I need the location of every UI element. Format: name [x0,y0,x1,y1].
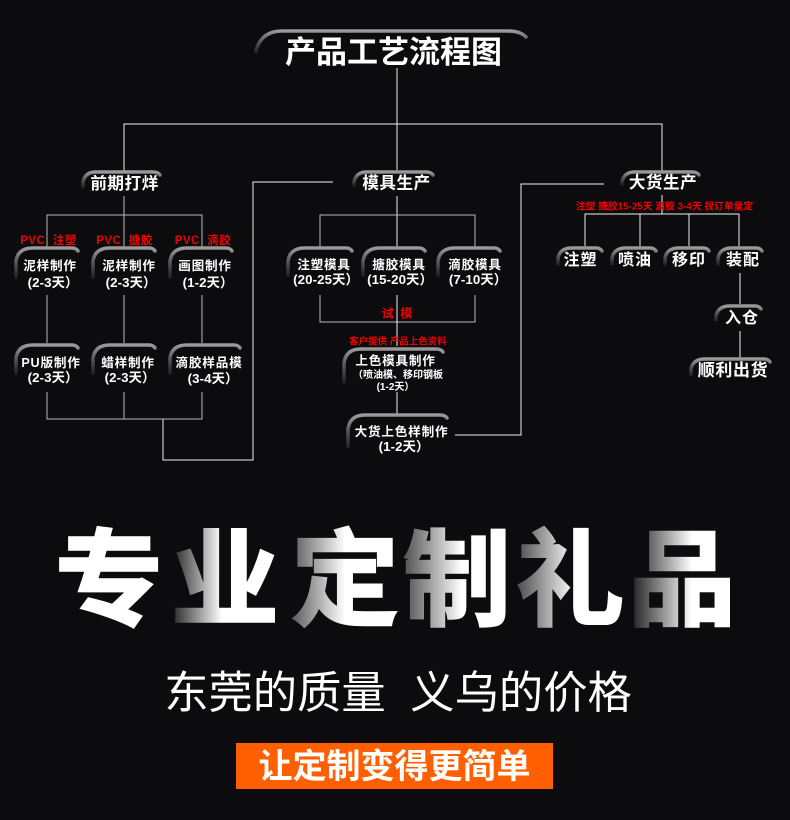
node: colour mould: 上色模具制作 [355,353,436,368]
headline: professional custom gifts: 专 [55,522,163,640]
node: epoxy sample mould: 滴胶样品模 [176,355,242,370]
node: epoxy mould [438,248,507,287]
node: colour mould: （喷油模、移印钢板 [353,368,443,381]
node: assembly [718,248,762,269]
node: colour mould [344,349,443,393]
node: injection [558,248,602,269]
node: warehousing: 入仓 [725,308,759,327]
node: clay sample slush: 泥样制作 [102,258,156,273]
node: clay sample injection: 泥样制作 [23,258,77,273]
headline: professional custom gifts: 业 [171,522,279,640]
node: shipped: 顺利出货 [698,360,768,380]
node: clay sample slush [93,248,156,290]
node: assembly: 装配 [726,251,760,269]
node: slush mould [363,248,433,287]
node: PU plate [16,345,81,385]
stage 3 header: 大货生产 [629,172,697,192]
node: pad print [665,248,709,269]
node: injection: 注塑 [563,250,598,269]
node: spray: 喷油 [618,251,652,269]
node: injection mould: 注塑模具 [297,257,351,272]
node: bulk colour sample [348,415,448,454]
node: wax sample: 蜡样制作 [101,355,155,370]
node: drawing [170,248,233,290]
node: drawing: 画图制作 [178,259,232,273]
node: clay sample injection: (2-3天） [28,275,78,290]
node: PU plate: PU版制作 [21,355,81,370]
stage 1 header: 前期打烊 [90,173,159,193]
headline: professional custom gifts [55,522,736,640]
red label: bulk lead times: 注塑 搪胶15-25天 滴胶 3-4天 视订单量定 [576,200,753,212]
node: epoxy mould: (7-10天） [449,272,507,287]
node: bulk colour sample: 大货上色样制作 [355,424,448,439]
node: slush mould: 搪胶模具 [372,257,426,272]
node: epoxy sample mould: (3-4天） [188,371,238,386]
node: colour mould: (1-2天） [377,381,414,393]
node: slush mould: (15-20天） [367,272,433,287]
stage 1 red labels: PVC 搪胶 [96,233,153,247]
node: epoxy sample mould [170,345,242,386]
node: injection mould [288,248,359,287]
node: drawing: (1-2天） [183,275,233,290]
stage 1 red labels: PVC 注塑 [20,233,77,247]
node: spray [612,248,656,269]
connector lines [47,68,740,460]
node: clay sample slush: (2-3天） [106,275,156,290]
node: injection mould: (20-25天） [293,272,359,287]
headline: professional custom gifts: 定 [291,522,399,640]
subheading: 东莞的质量 义乌的价格 [164,669,632,718]
node: epoxy mould: 滴胶模具 [448,257,502,272]
node: warehousing [716,306,761,327]
title: process flow chart: 产品工艺流程图 [285,35,502,70]
node: wax sample: (2-3天） [105,370,155,385]
red label: trial mould: 试 模 [382,306,412,320]
stage 1 red labels: PVC 滴胶 [175,233,231,247]
node: bulk colour sample: (1-2天） [379,439,429,454]
headline: professional custom gifts: 品 [628,522,736,640]
node: PU plate: (2-3天） [28,370,78,385]
stage 1 red labels [20,233,231,247]
orange banner: 让定制变得更简单 [258,748,530,786]
node: clay sample injection [16,248,78,290]
headline: professional custom gifts: 礼 [516,522,624,640]
red label: customer provided colour data: 客户提供 产品上色资料 [349,336,447,348]
stage 2 header: 模具生产 [362,174,431,192]
node: wax sample [93,345,155,385]
node: pad print: 移印 [672,250,706,269]
headline: professional custom gifts: 制 [403,522,511,640]
